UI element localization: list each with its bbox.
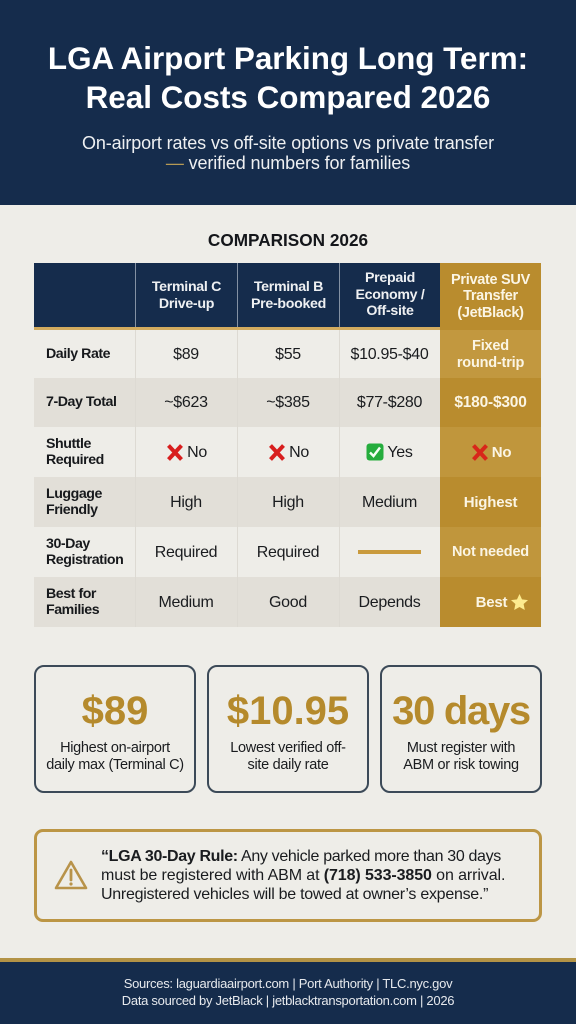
value: Not needed: [452, 544, 529, 560]
value: ~$385: [266, 394, 310, 411]
value: $55: [275, 346, 301, 362]
label: Required: [46, 452, 104, 468]
footer sources: Sources: laguardiaairport.com | Port Authority | TLC.nyc.gov: [124, 976, 452, 991]
label: Luggage: [46, 486, 102, 502]
gold header rule: [34, 327, 440, 330]
value: round-trip: [457, 355, 524, 371]
stat caption: Highest on-airport: [60, 740, 170, 756]
light band: shuttle: [440, 427, 541, 477]
value: yes: [366, 444, 413, 460]
value: Required: [257, 544, 319, 560]
value: no: [472, 444, 511, 461]
label: Daily Rate: [46, 346, 110, 362]
stat caption: daily max (Terminal C): [46, 757, 184, 773]
value: Depends: [359, 594, 420, 610]
footer: [0, 958, 576, 1024]
stat caption: [46, 740, 184, 773]
value: no: [269, 444, 309, 461]
header: Private SUV Transfer (JetBlack): [451, 272, 530, 321]
header: Terminal C Drive-up: Terminal C: [152, 278, 221, 294]
stat card: $89: [34, 665, 196, 793]
label: Friendly: [46, 502, 98, 518]
value: yes: Yes: [387, 444, 413, 460]
subtitle: [82, 133, 494, 173]
value: best with star: [476, 594, 528, 610]
header: Prepaid Economy / Off-site: Prepaid: [365, 270, 415, 286]
column rules: [135, 330, 136, 627]
callout text: must be registered with ABM at (718) 533-3850 on arrival.: [101, 867, 505, 884]
private transfer column background: [440, 263, 541, 627]
label: [46, 486, 102, 518]
label: [46, 586, 100, 618]
stat caption: Must register with: [407, 740, 515, 756]
header: Prepaid Economy / Off-site: Off-site: [366, 303, 414, 319]
row: 7-Day Total: [46, 394, 527, 411]
section heading: COMPARISON 2026: [208, 230, 368, 250]
stat caption: [403, 740, 519, 773]
stat number: 30 days: [392, 689, 530, 733]
header: Private SUV Transfer (JetBlack): (JetBlack): [457, 305, 524, 321]
value: Medium: [158, 594, 214, 610]
label: 30-Day: [46, 536, 90, 552]
table header row: [34, 263, 440, 327]
stat number: $89: [82, 689, 148, 733]
row: 30-Day Registration: [46, 536, 529, 568]
value: Highest: [464, 494, 517, 510]
value: $77-$280: [357, 394, 422, 411]
footer sources: [122, 976, 454, 1008]
label: [46, 436, 104, 468]
callout: 30-day rule: [34, 829, 542, 922]
title: [48, 41, 528, 115]
light band: registration: [440, 527, 541, 577]
stat caption: Lowest verified off-: [230, 740, 346, 756]
value: best with star: Best: [476, 594, 507, 610]
label: [46, 536, 123, 568]
row: Best for Families: [46, 586, 528, 618]
value: [457, 338, 524, 371]
label: Registration: [46, 552, 123, 568]
header: Prepaid Economy / Off-site: Economy /: [355, 287, 425, 303]
stat caption: ABM or risk towing: [403, 757, 519, 773]
value: Good: [269, 594, 307, 610]
stat card: 30 days: [380, 665, 542, 793]
value: Fixed: [472, 338, 509, 354]
row: Daily Rate: [46, 338, 524, 371]
header: Private SUV Transfer (JetBlack): Private SUV: [451, 272, 530, 288]
label: Families: [46, 602, 99, 618]
value: $180-$300: [454, 394, 527, 411]
header band: [0, 0, 576, 205]
header: Terminal C Drive-up: Drive-up: [159, 296, 214, 312]
value: High: [272, 494, 304, 510]
header: Terminal B Pre-booked: [237, 263, 339, 327]
value: Required: [155, 544, 217, 560]
header: Terminal B Pre-booked: Terminal B: [254, 278, 323, 294]
header: Prepaid Economy / Off-site: [339, 263, 440, 327]
stat number: $10.95: [227, 689, 349, 733]
value: $89: [173, 346, 199, 362]
header: Private SUV Transfer (JetBlack): Transfer: [463, 288, 518, 304]
row stripes: [34, 378, 440, 427]
value: High: [170, 494, 202, 510]
stat card: $10.95: [207, 665, 369, 793]
value: no: No: [187, 444, 207, 460]
row: Shuttle Required: [46, 436, 511, 468]
value: dash: [358, 550, 421, 554]
label: 7-Day Total: [46, 394, 116, 410]
value: ~$623: [164, 394, 208, 411]
label: Best for: [46, 586, 96, 602]
stat caption: [230, 740, 346, 773]
value: no: No: [492, 444, 511, 460]
value: $10.95-$40: [351, 346, 428, 362]
callout text: “LGA 30-Day Rule: Any vehicle parked more than 30 days: [101, 848, 501, 865]
callout text: Unregistered vehicles will be towed at owner’s expense.”: [101, 886, 488, 903]
callout text: [101, 848, 505, 903]
header: Terminal B Pre-booked: Pre-booked: [251, 296, 326, 312]
title: Real Costs Compared 2026: [86, 80, 490, 115]
label: Shuttle: [46, 436, 91, 452]
header: Terminal C Drive-up: [135, 263, 237, 327]
title: LGA Airport Parking Long Term:: [48, 41, 528, 76]
subtitle: On-airport rates vs off-site options vs private transfer: [82, 133, 494, 153]
value: Medium: [362, 494, 417, 510]
subtitle: — verified numbers for families: [166, 153, 410, 173]
stat caption: site daily rate: [248, 757, 328, 773]
light band: daily rate: [440, 330, 541, 378]
comparison table: [34, 263, 541, 627]
value: no: [167, 444, 207, 461]
row: Luggage Friendly: [46, 486, 518, 518]
value: no: No: [289, 444, 309, 460]
footer sources: Data sourced by JetBlack | jetblacktransportation.com | 2026: [122, 992, 454, 1008]
icon: warning triangle: [54, 860, 88, 890]
